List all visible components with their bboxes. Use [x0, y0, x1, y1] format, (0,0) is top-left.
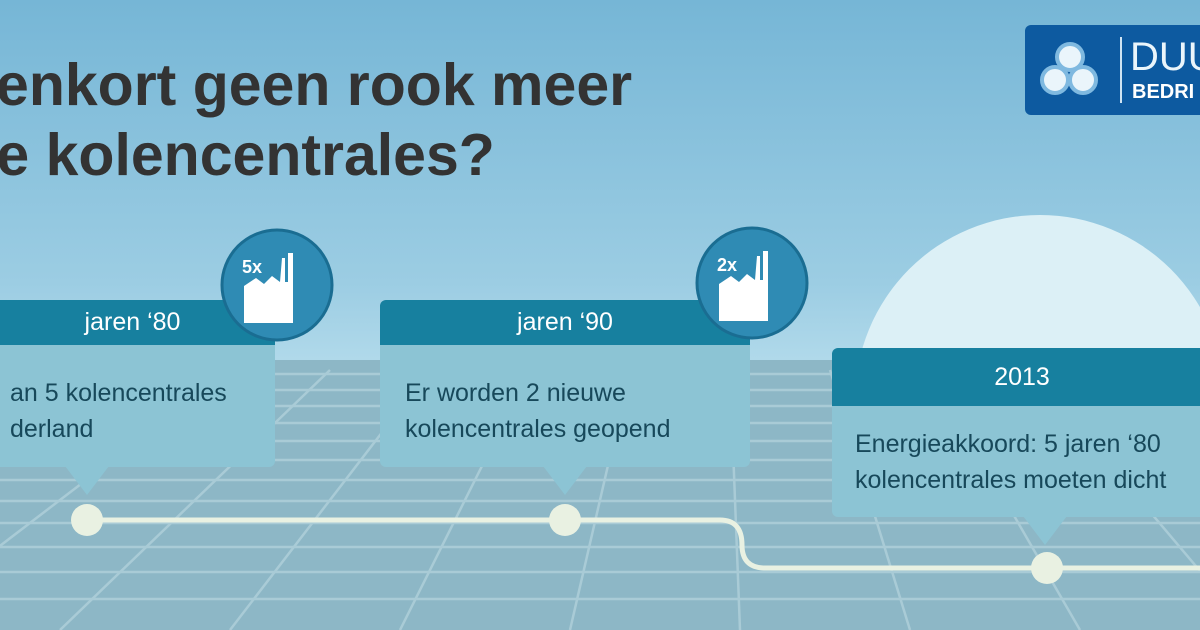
logo: BEDRI	[1132, 81, 1194, 103]
title	[0, 52, 632, 188]
icon: factory 5x	[220, 228, 334, 342]
panel: jaren 80: an 5 kolencentrales	[10, 379, 227, 407]
icon: factory 2x: 2x	[717, 255, 737, 275]
panel: 2013: Energieakkoord: 5 jaren ‘80	[855, 430, 1161, 458]
panel: jaren 80	[0, 300, 275, 467]
panel: jaren 80: jaren ‘80	[85, 308, 180, 336]
panel: jaren 90: jaren ‘90	[517, 308, 613, 336]
icon: factory 2x	[696, 226, 808, 340]
panel: 2013: 2013	[994, 363, 1050, 391]
panel: jaren 90	[380, 300, 750, 467]
panel: jaren 90: Er worden 2 nieuwe	[405, 379, 626, 407]
panel: 2013	[832, 348, 1200, 517]
panel: jaren 90: kolencentrales geopend	[405, 415, 670, 443]
title: enkort geen rook meer	[0, 52, 632, 118]
icon: factory 5x: 5x	[242, 257, 262, 277]
panel: jaren 80: derland	[10, 415, 93, 443]
logo	[1025, 25, 1200, 115]
panel: 2013: kolencentrales moeten dicht	[855, 466, 1166, 494]
